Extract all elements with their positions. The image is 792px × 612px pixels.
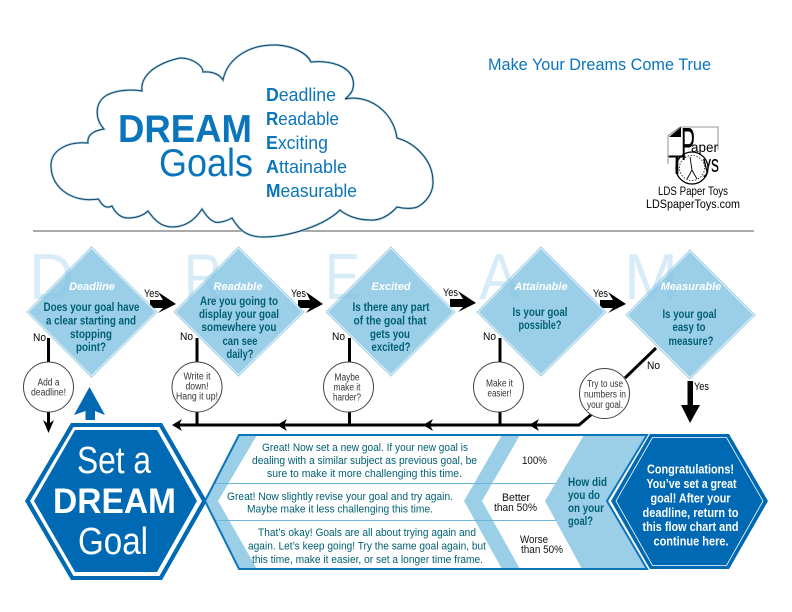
Yes and No labels xyxy=(33,287,709,393)
panel: Deadline diamond: a clear starting and xyxy=(46,314,136,328)
panel: Measurable diamond: easy to xyxy=(672,320,706,334)
question: How did you do xyxy=(568,475,607,528)
panel: Readable diamond: daily? xyxy=(226,347,254,361)
Yes arrows xyxy=(150,291,700,423)
hexagon: Set a DREAM Goal: DREAM xyxy=(53,482,176,521)
ghost letter R: R xyxy=(184,240,222,313)
circle: Maybe make it harder: make it xyxy=(334,382,361,394)
cloud outline xyxy=(51,45,433,237)
question: Are you going to xyxy=(200,294,278,308)
circle: Write it down: Hang it up! xyxy=(176,392,218,402)
Yes and No labels: Yes xyxy=(291,288,306,300)
tagline: Make Your Dreams Come True xyxy=(488,55,711,74)
label: Deadline xyxy=(69,281,115,293)
score labels: Better xyxy=(502,492,530,504)
Yes and No labels: No xyxy=(483,331,496,343)
hexagon: Set a DREAM Goal xyxy=(25,423,207,580)
panel: Deadline diamond xyxy=(27,240,157,377)
circle: Make it easier: easier! xyxy=(488,388,512,400)
circle: Try to use numbers: Try to use xyxy=(587,379,623,390)
outcome text: 100 percent: dealing with a similar subject as previous goal, be xyxy=(252,455,477,467)
question: How did you do: you do xyxy=(568,488,600,502)
question: Does your goal have xyxy=(44,300,140,314)
outcome text: better than 50 percent xyxy=(227,491,453,516)
ghost letter M: M xyxy=(624,240,678,313)
outcome text: 100 percent: sure to make it more challenging this time. xyxy=(267,468,462,480)
acronym list: Readable xyxy=(266,109,339,129)
ghost letter E: E xyxy=(325,240,360,313)
panel outline xyxy=(205,435,647,569)
Yes and No labels: No xyxy=(332,331,345,343)
outcome text: worse than 50 percent: this time, make it easier, or set a longer time frame. xyxy=(252,554,483,566)
logo: LDS Paper Toys: P xyxy=(681,118,695,170)
logo: LDS Paper Toys: LDSpaperToys.com xyxy=(646,199,740,211)
circle: Try to use numbers: numbers in xyxy=(584,390,626,400)
score labels: 100% xyxy=(522,455,547,467)
logo: LDS Paper Toys: ys xyxy=(703,151,719,178)
circle: Try to use numbers xyxy=(580,368,630,418)
divider line xyxy=(33,230,754,232)
panel background xyxy=(205,435,647,569)
question: Is there any part xyxy=(352,300,430,314)
arrowheads on return line xyxy=(43,419,539,433)
Yes and No labels: Yes xyxy=(593,288,608,300)
hexagon: Congratulations xyxy=(611,434,768,569)
circle: Add a deadline xyxy=(24,362,74,412)
row dividers xyxy=(213,484,556,520)
panel: Excited diamond: gets you xyxy=(370,327,410,341)
logo clock xyxy=(676,152,708,184)
panel: Attainable diamond: possible? xyxy=(518,318,562,332)
hexagon: Congratulations: this flow chart and xyxy=(642,520,738,534)
outcome text: 100 percent xyxy=(252,442,477,480)
heading: Goals: Goals xyxy=(159,142,253,185)
Yes and No labels: Yes xyxy=(694,381,709,393)
question: Is your goal xyxy=(662,307,716,321)
hexagon: Set a DREAM Goal: Goal xyxy=(78,521,148,563)
Yes and No labels: No xyxy=(180,331,193,343)
acronym list: Measurable xyxy=(266,181,357,201)
light blue bands xyxy=(205,435,257,569)
acronym list xyxy=(266,85,357,201)
acronym list: Deadline xyxy=(266,85,336,105)
panel: Excited diamond: excited? xyxy=(372,340,410,354)
circle: Try to use numbers: your goal. xyxy=(587,400,623,411)
circle: Add a deadline: deadline! xyxy=(31,388,66,398)
panel: Readable diamond: display your goal xyxy=(199,307,279,321)
circle: Write it down xyxy=(172,362,222,412)
panel: Attainable diamond xyxy=(477,240,606,376)
circle: Add a deadline: Add a xyxy=(38,378,60,388)
label: Excited xyxy=(371,281,411,293)
score labels xyxy=(494,455,563,556)
score labels: Worse xyxy=(520,534,548,546)
outcome text: better than 50 percent: Great! Now slightly revise your goal and try again. xyxy=(227,491,453,503)
Yes and No labels: No xyxy=(647,360,660,372)
circle: Write it down: down! xyxy=(186,382,208,392)
label: Measurable xyxy=(661,281,721,293)
circle: Maybe make it harder: harder? xyxy=(333,392,361,404)
heading: DREAM: DREAM xyxy=(118,108,252,151)
score labels: than 50% xyxy=(521,544,563,556)
acronym list: Exciting xyxy=(266,133,328,153)
panel: Readable diamond: somewhere you xyxy=(202,320,276,334)
acronym list: Attainable xyxy=(266,157,347,177)
question: How did you do: goal? xyxy=(568,514,593,528)
circle: Maybe make it harder: Maybe xyxy=(334,372,360,384)
panel: Excited diamond xyxy=(325,240,455,376)
label: Readable xyxy=(214,281,262,293)
logo captions: LDS Paper Toys xyxy=(658,186,728,198)
hexagon: Congratulations: deadline, return to xyxy=(642,506,739,520)
Yes and No labels: No xyxy=(33,332,46,344)
question: How did you do: on your xyxy=(568,501,604,515)
panel: Deadline diamond: point? xyxy=(76,340,106,354)
logo: LDS Paper Toys: aper xyxy=(691,139,718,155)
ghost letter A: A xyxy=(479,240,520,313)
question: Is your goal xyxy=(512,305,568,319)
hexagon: Congratulations: goal! After your xyxy=(650,492,731,506)
logo box xyxy=(668,127,718,164)
panel: Readable diamond: can see xyxy=(222,334,258,348)
outcome text: worse than 50 percent xyxy=(248,527,486,566)
Yes and No labels: Yes xyxy=(443,287,458,299)
panel: Measurable diamond xyxy=(624,240,755,379)
circle: Make it easier xyxy=(474,362,524,412)
ghost letter D: D xyxy=(29,240,74,313)
icon: blue up arrow xyxy=(74,387,105,420)
panel: Excited diamond: of the goal that xyxy=(354,314,426,328)
question: How did you do: How did xyxy=(568,475,607,489)
connector lines xyxy=(48,338,656,425)
label: Attainable xyxy=(513,281,568,293)
Yes and No labels: Yes xyxy=(144,288,159,300)
outcome text: better than 50 percent: Maybe make it less challenging this time. xyxy=(247,504,433,516)
logo: LDS Paper Toys: T xyxy=(668,150,686,180)
panel: Measurable diamond: measure? xyxy=(668,334,714,348)
circle: Maybe make it harder xyxy=(324,362,374,412)
panel: Readable diamond xyxy=(174,240,304,376)
panel: outcomes chevron xyxy=(205,435,647,569)
score labels: than 50% xyxy=(494,502,537,514)
hexagon: Congratulations: continue here. xyxy=(654,534,728,548)
outcome text: worse than 50 percent: That’s okay! Goals are all about trying again and xyxy=(258,527,476,539)
outcome text: 100 percent: Great! Now set a new goal. If your new goal is xyxy=(262,442,468,454)
circle: Make it easier: Make it xyxy=(486,378,513,390)
text: Congratulations! xyxy=(647,462,734,476)
outcome text: worse than 50 percent: again. Let’s keep going! Try the same goal again, but xyxy=(248,540,486,552)
circle: Write it down: Write it xyxy=(184,372,211,382)
cloud with title xyxy=(51,45,433,237)
text: Set a xyxy=(77,440,152,482)
panel: Deadline diamond: stopping xyxy=(70,327,112,341)
hexagon: Congratulations: You’ve set a great xyxy=(646,477,737,491)
logo: LDS Paper Toys xyxy=(646,118,740,211)
